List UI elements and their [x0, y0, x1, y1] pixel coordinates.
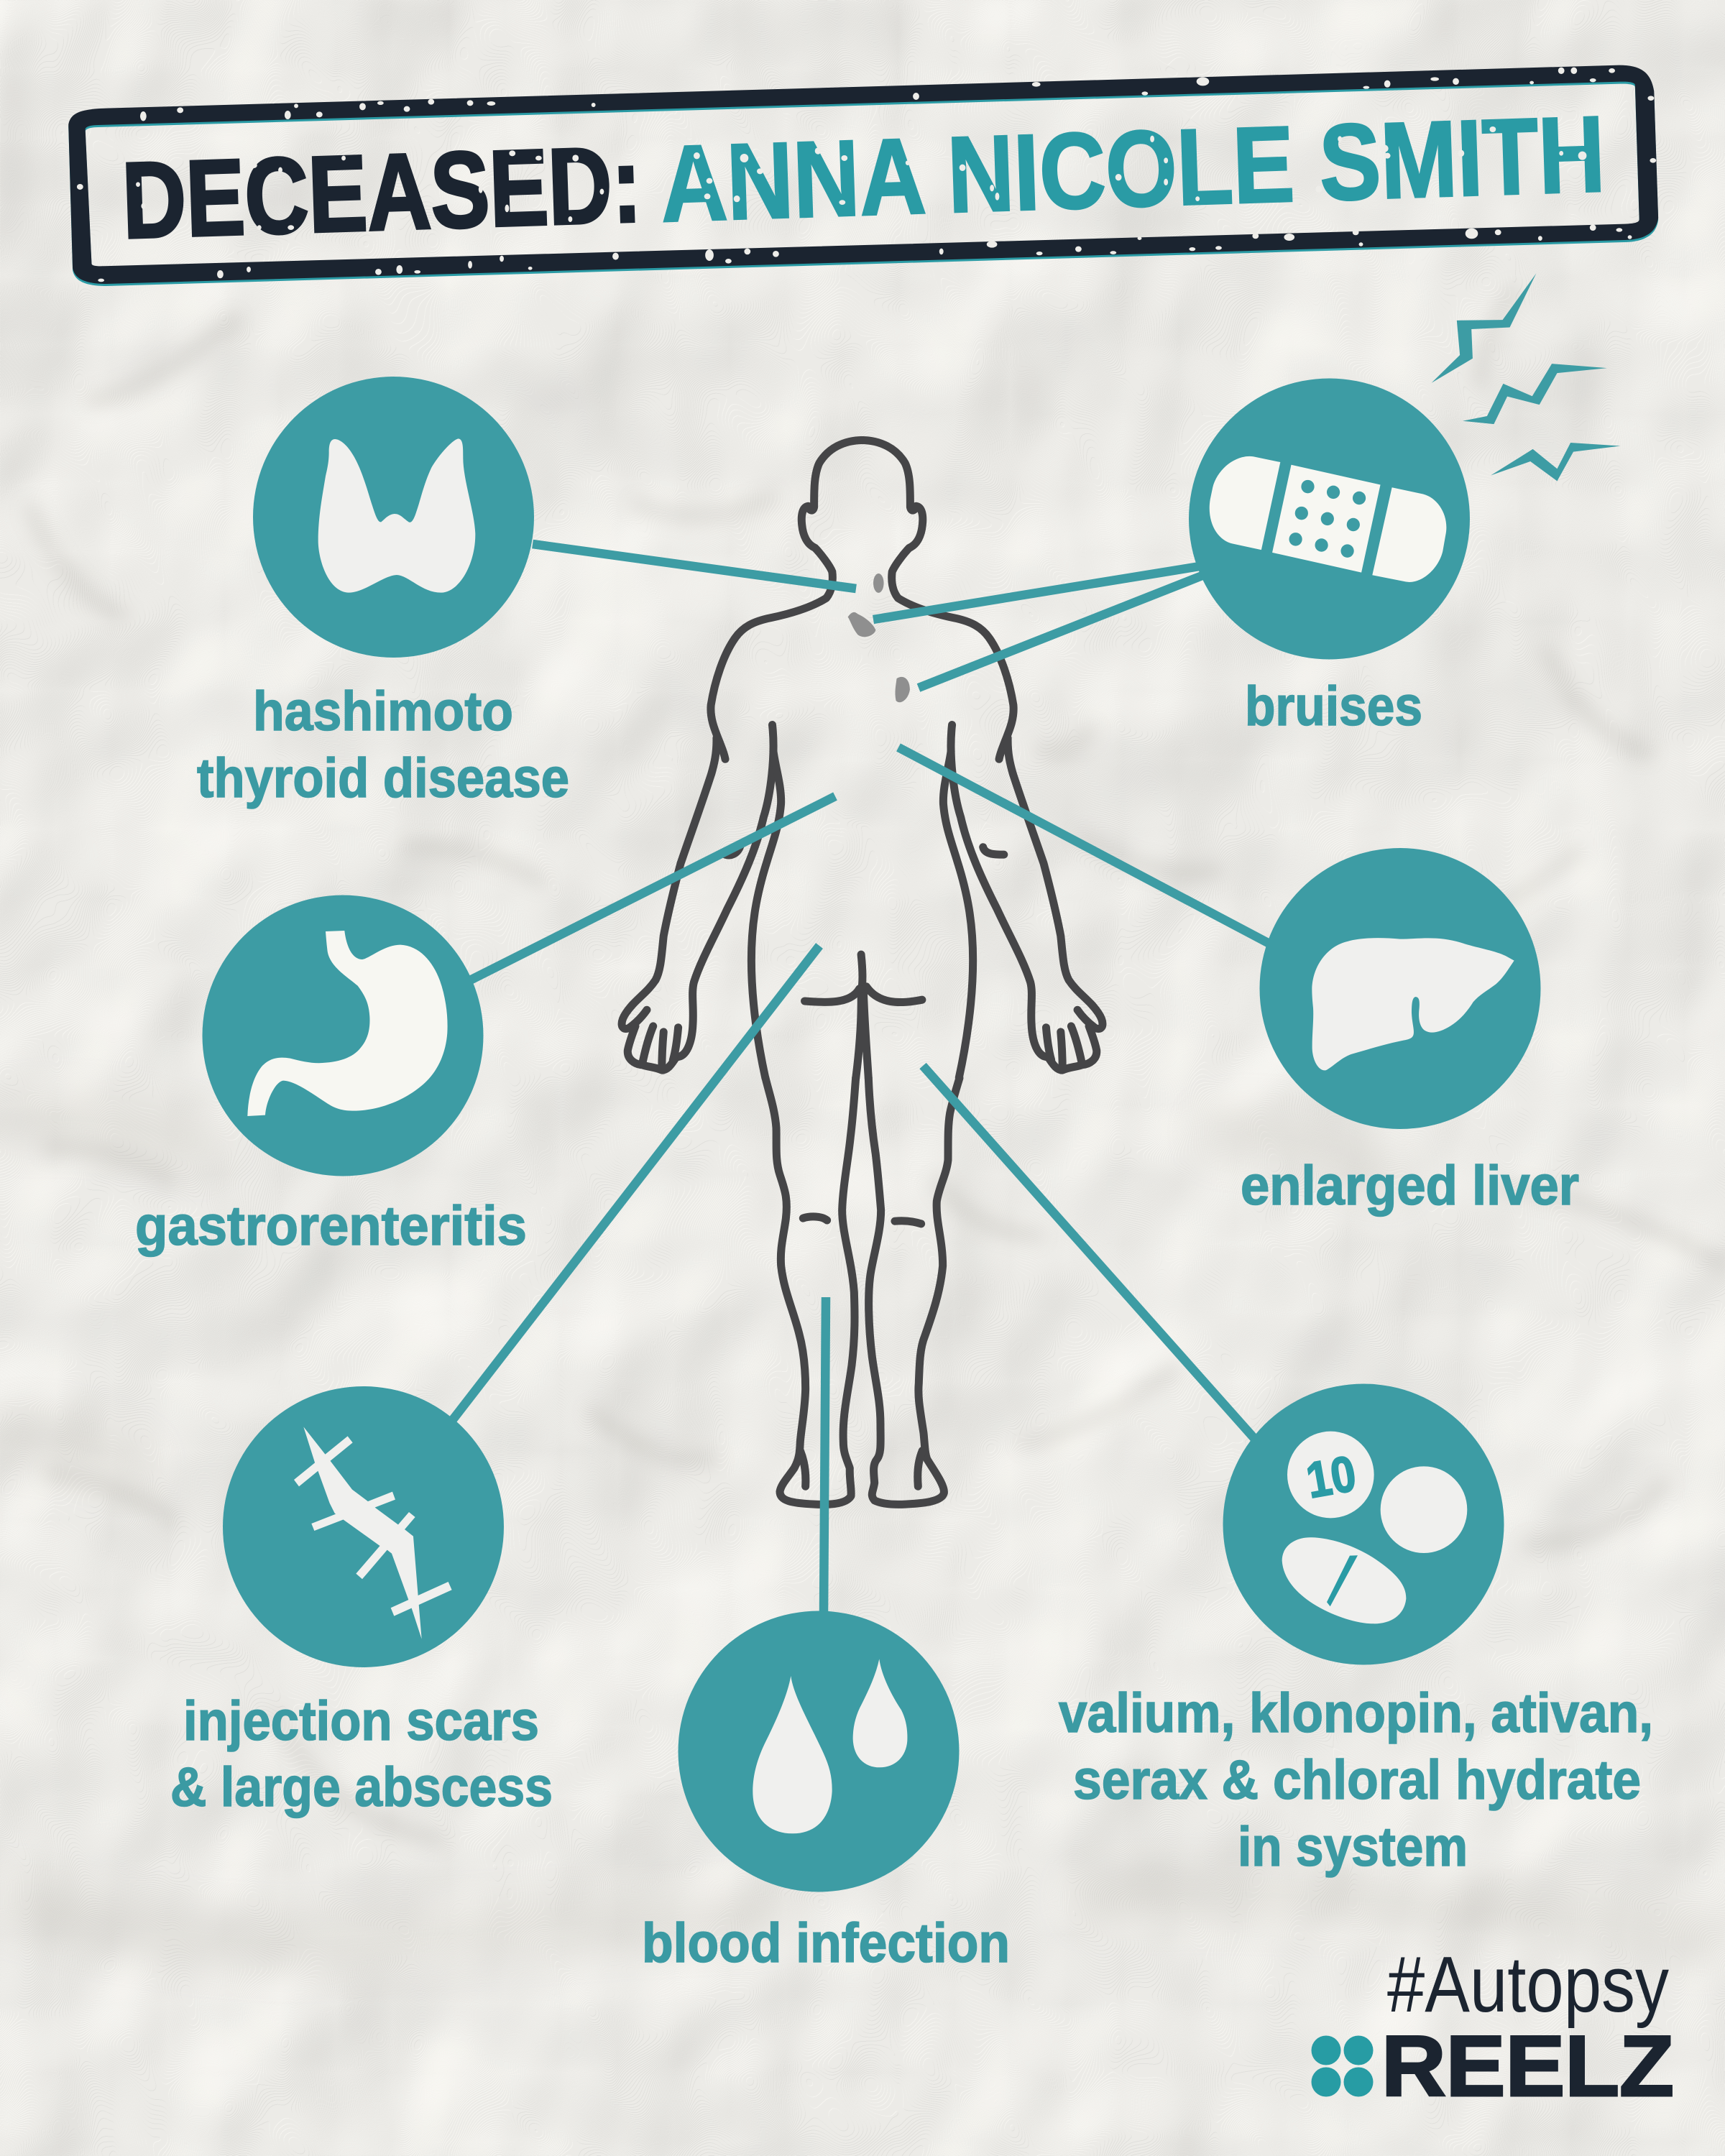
circle — [1189, 378, 1470, 660]
connector lines — [451, 544, 1271, 1613]
title text: deceased: DECEASED: — [121, 124, 643, 261]
label line 1: valium, klonopin, ativan, — [1059, 1682, 1653, 1744]
icon: stitched scar — [294, 1427, 452, 1639]
icon: pain lightning bolts — [1432, 273, 1621, 481]
circle — [678, 1611, 959, 1892]
panel: enlarged liver — [1241, 848, 1579, 1217]
panel: gastroenteritis — [135, 895, 527, 1257]
label line 2: serax & chloral hydrate — [1073, 1749, 1641, 1811]
label: enlarged liver — [1241, 1155, 1579, 1217]
circle — [1223, 1384, 1504, 1664]
upper body left half — [622, 440, 1103, 1078]
circle — [1259, 848, 1541, 1129]
title stamp — [68, 65, 1658, 286]
label: gastrorenteritis — [135, 1195, 527, 1257]
label: injection scars — [183, 1690, 539, 1752]
label: bruises — [1245, 676, 1422, 737]
label: hashimoto — [253, 681, 513, 742]
icon: liver — [1312, 938, 1514, 1070]
stamp border: teal edge — [68, 68, 1658, 286]
label: blood infection — [642, 1912, 1010, 1974]
panel: hashimoto thyroid disease — [197, 377, 569, 809]
icon: pills — [1282, 1432, 1467, 1623]
label line 2: thyroid disease — [197, 747, 569, 809]
logo wordmark: REELZ — [1381, 2018, 1674, 2114]
icon: bandage — [1210, 456, 1446, 582]
legs — [765, 1078, 960, 1504]
circle — [253, 377, 534, 658]
logo dots — [1311, 2035, 1373, 2097]
panel: blood infection — [642, 1611, 1010, 1974]
circle — [203, 895, 483, 1176]
hashtag: #Autopsy — [1387, 1940, 1669, 2029]
panel: injection scars — [170, 1386, 553, 1818]
label line 3: in system — [1238, 1816, 1468, 1878]
circle — [223, 1386, 504, 1667]
panel: bruises — [1189, 273, 1621, 737]
stamp speckles — [77, 68, 1656, 282]
bruise marks on body — [848, 573, 910, 702]
label line 2: & large abscess — [170, 1756, 553, 1818]
logo: Reelz — [1311, 2018, 1674, 2114]
icon: thyroid — [318, 438, 475, 593]
upper body right half (mirrored) — [862, 440, 1103, 1078]
pill number: 10 — [1302, 1445, 1360, 1508]
icon: stomach — [247, 931, 448, 1116]
body outline figure — [622, 440, 1103, 1504]
icon: blood drops — [753, 1659, 907, 1833]
panel: drugs in system — [1059, 1384, 1653, 1878]
stamp border: dark frame — [68, 65, 1658, 284]
